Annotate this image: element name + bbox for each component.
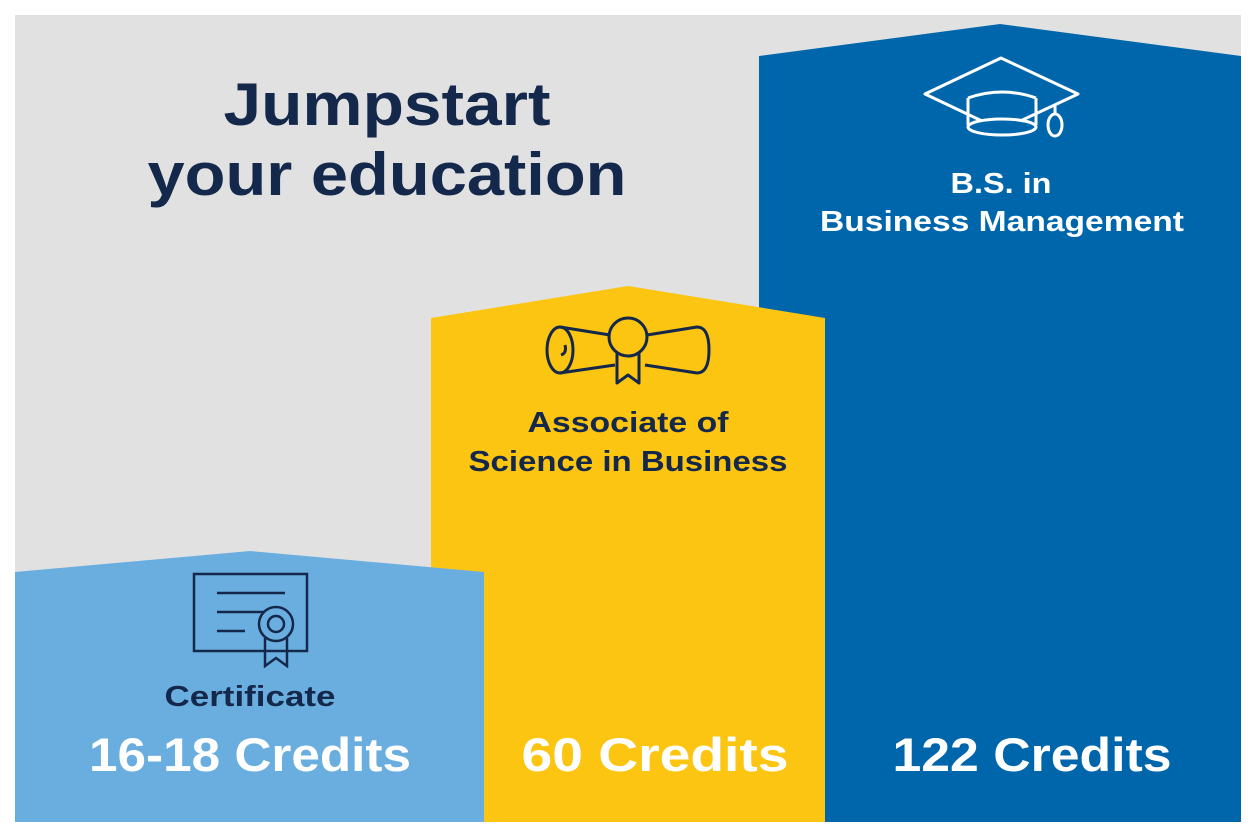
panel: certificate — [15, 551, 484, 822]
label: associate — [468, 407, 788, 478]
title: your education — [148, 141, 626, 208]
label: associate: Science in Business — [468, 446, 788, 478]
panel: bachelor — [759, 24, 1241, 822]
icon: graduation cap — [925, 58, 1078, 136]
label: associate: Associate of — [528, 407, 729, 439]
label: bachelor: Business Management — [820, 206, 1184, 238]
panel: associate — [431, 286, 825, 822]
label: bachelor: B.S. in — [950, 168, 1052, 200]
label: certificate: Certificate — [164, 681, 336, 713]
credits: certificate: 16-18 Credits — [89, 728, 411, 781]
title — [148, 71, 626, 208]
label: bachelor — [820, 168, 1184, 238]
icon: certificate — [194, 574, 307, 666]
credits: bachelor: 122 Credits — [892, 728, 1172, 781]
credits: associate: 60 Credits — [522, 728, 788, 781]
icon: diploma scroll — [547, 318, 709, 383]
title: Jumpstart — [224, 71, 551, 138]
